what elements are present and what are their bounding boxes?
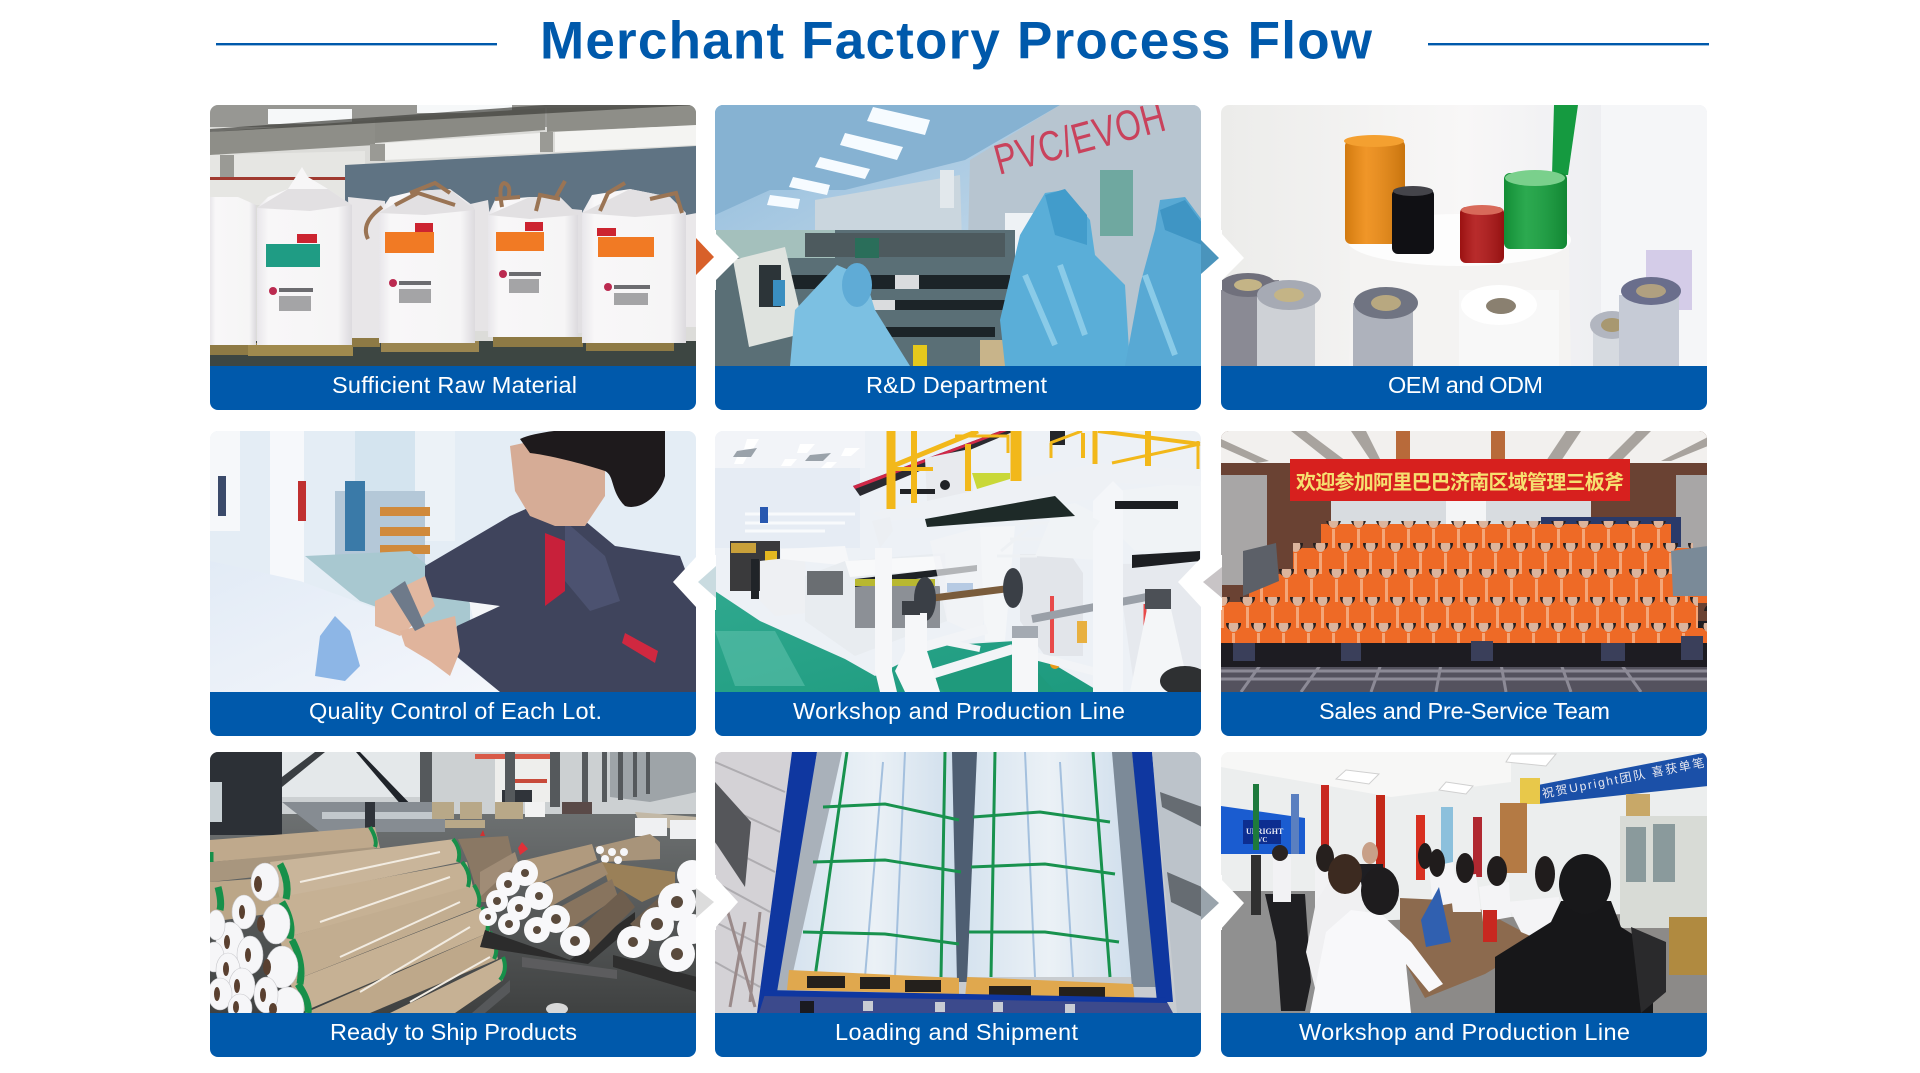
arrow: R&D to OEM xyxy=(1201,230,1244,290)
arrow: ready to ship to loading xyxy=(696,875,738,930)
caption: Sufficient Raw Material xyxy=(332,372,577,398)
panel: R&D Department xyxy=(715,93,1202,410)
photo: stacked film rolls xyxy=(204,752,707,1027)
panel: Quality Control of Each Lot. xyxy=(210,428,697,736)
photo: meeting room with flags: UPRIGHT xyxy=(1246,827,1284,836)
panel: Workshop and Production Line (meeting) xyxy=(1221,752,1710,1057)
title rule right xyxy=(1428,43,1709,45)
arrow: workshop to quality control xyxy=(673,555,716,610)
caption bar xyxy=(210,366,697,410)
title: Merchant Factory Process Flow xyxy=(540,12,1373,70)
caption: Quality Control of Each Lot. xyxy=(309,698,602,724)
panel: Loading and Shipment xyxy=(715,752,1202,1057)
caption: Ready to Ship Products xyxy=(330,1019,577,1045)
caption bar xyxy=(210,1013,697,1057)
arrow: loading to meeting xyxy=(1201,875,1244,930)
caption: Loading and Shipment xyxy=(835,1019,1078,1045)
caption: Sales and Pre-Service Team xyxy=(1319,698,1610,724)
photo: meeting room with flags: 祝贺Upright团队 喜获单笔 xyxy=(1541,755,1706,801)
caption bar xyxy=(715,1013,1202,1057)
caption bar xyxy=(1221,366,1708,410)
caption bar xyxy=(715,692,1202,736)
photo: inspector checking film xyxy=(210,428,697,692)
photo: clean room with workers: PVC/EVOH xyxy=(989,93,1171,185)
arrow: raw material to R&D xyxy=(696,230,739,290)
photo: team group photo: 欢迎参加阿里巴巴济南区域管理三板斧 xyxy=(1296,470,1624,494)
title rule left xyxy=(216,43,497,45)
caption: Workshop and Production Line xyxy=(1299,1019,1630,1045)
photo: PVC resin bags in warehouse xyxy=(210,105,697,366)
caption: Workshop and Production Line xyxy=(793,698,1125,724)
photo: meeting room with flags xyxy=(1221,752,1710,1013)
caption bar xyxy=(1221,1013,1708,1057)
caption bar xyxy=(210,692,697,736)
photo: production line machinery xyxy=(715,431,1210,696)
photo: clean room with workers xyxy=(715,93,1202,366)
panel: Sales and Pre-Service Team xyxy=(1221,431,1709,736)
photo: coloured PVC film rolls xyxy=(1220,105,1708,366)
panel: Sufficient Raw Material xyxy=(210,105,697,410)
photo: team group photo xyxy=(1221,431,1709,692)
photo: meeting room with flags: PVC xyxy=(1253,836,1267,844)
caption: OEM and ODM xyxy=(1388,372,1543,398)
caption bar xyxy=(1221,692,1708,736)
arrow: OEM to sales team (row 2 right) xyxy=(1178,555,1222,610)
panel: Ready to Ship Products xyxy=(204,752,707,1057)
caption: R&D Department xyxy=(866,372,1047,398)
panel: Workshop and Production Line xyxy=(715,431,1210,736)
panel: OEM and ODM xyxy=(1220,105,1708,410)
photo: container loaded with pallets xyxy=(715,752,1202,1013)
caption bar xyxy=(715,366,1202,410)
